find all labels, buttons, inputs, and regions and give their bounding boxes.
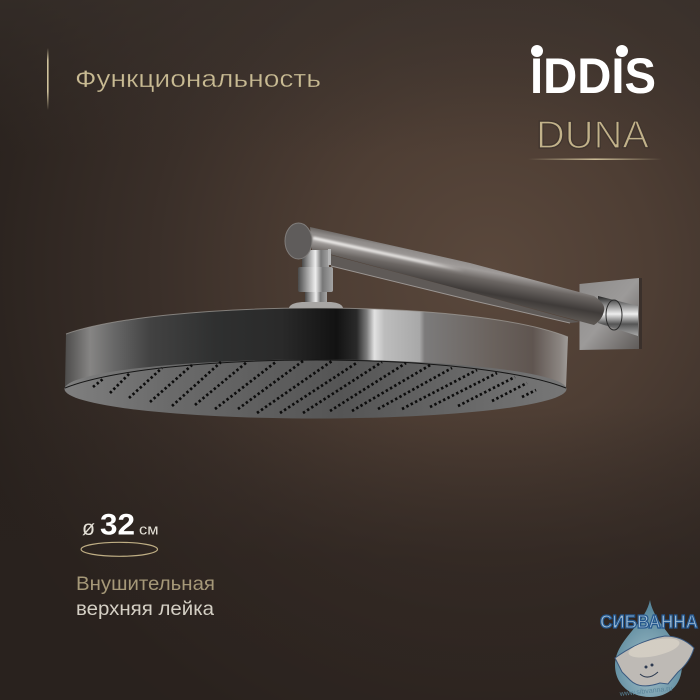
top rim highlight: [66, 308, 568, 337]
diameter spec: [81, 508, 158, 556]
header accent line: [47, 48, 49, 110]
wall plate: [580, 278, 642, 350]
shop name: СИБВАННА: [600, 612, 698, 632]
face back edge: [65, 360, 566, 388]
caption: [76, 573, 215, 620]
water drop: [615, 600, 682, 697]
swivel joint: [289, 249, 343, 308]
series underline: [528, 158, 662, 160]
shower head side wall: [65, 308, 568, 388]
caption gold line: Внушительная: [76, 573, 215, 595]
diameter unit: см: [139, 522, 158, 538]
heading: Функциональность: [75, 66, 321, 93]
bathtub: [615, 636, 694, 686]
diameter symbol: ø: [82, 517, 95, 540]
watermark logo: [600, 600, 698, 698]
ellipse icon: [81, 542, 158, 556]
arm end cap: [285, 223, 312, 259]
series name: DUNA: DUNA: [536, 114, 649, 157]
spray nozzles: [93, 361, 536, 413]
caption light line: верхняя лейка: [76, 598, 214, 620]
diameter value: 32: [100, 508, 135, 542]
shower head face: [64, 360, 566, 418]
brand logo: IDDIS: IDDIS: [530, 48, 656, 104]
shop url: www.sibvanna.ru: [618, 685, 673, 698]
shower product: [64, 223, 642, 418]
shower arm: [310, 227, 604, 325]
bath face: [640, 664, 658, 677]
